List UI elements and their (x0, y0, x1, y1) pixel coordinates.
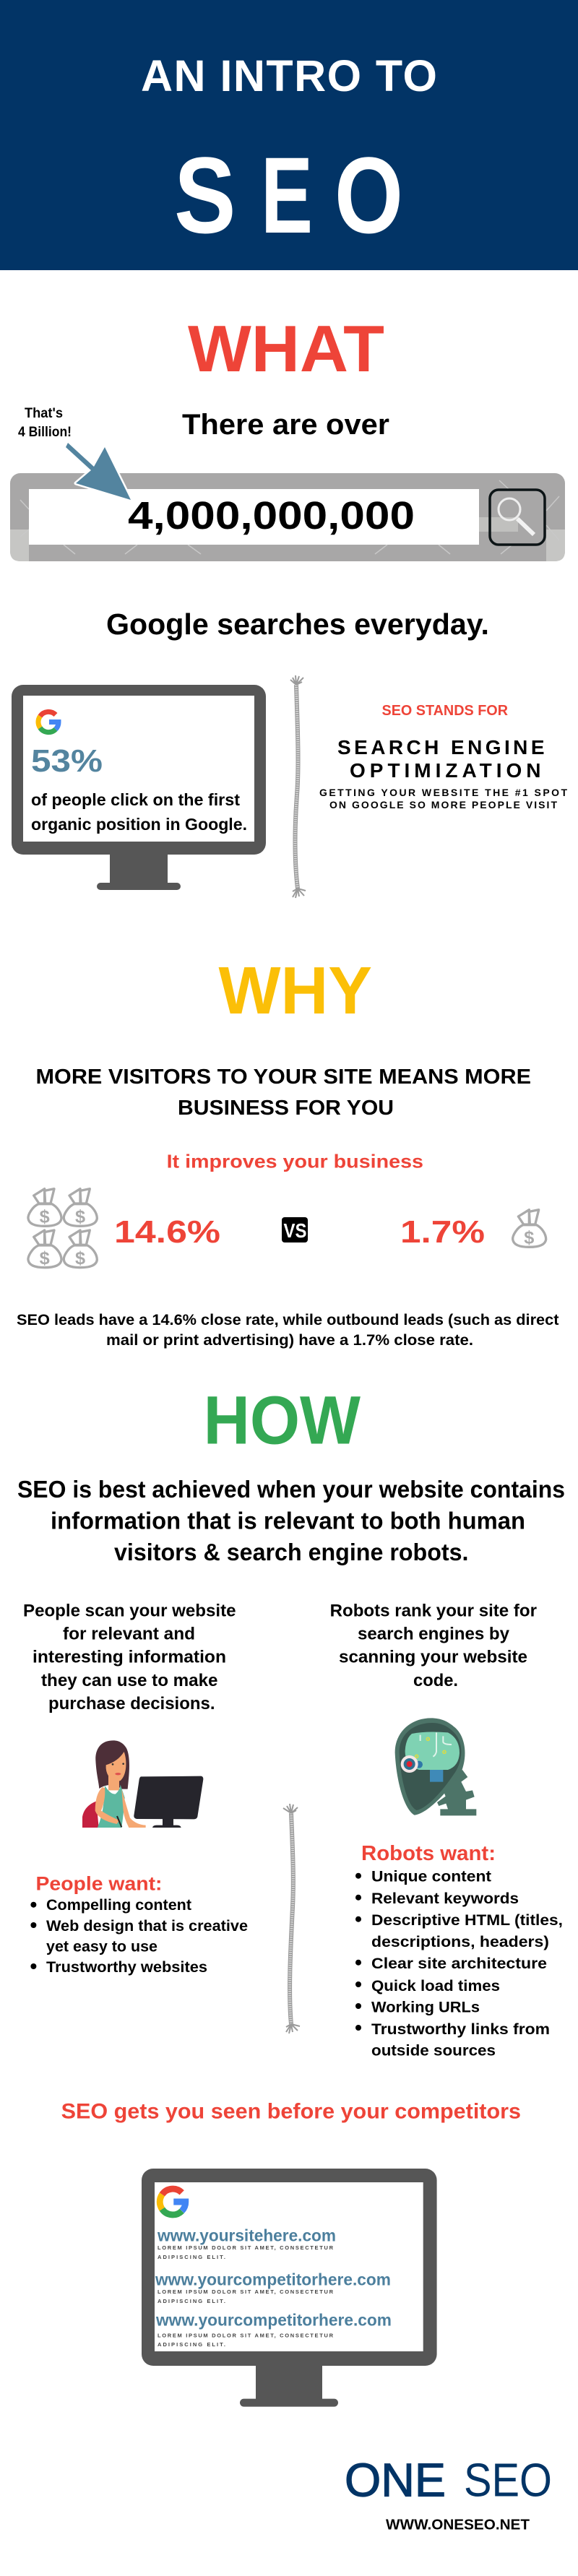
illustration: robot head (395, 1718, 476, 1815)
list: robots want: Unique content (371, 1869, 491, 1885)
result: competitor one: ADIPISCING ELIT. (158, 2298, 225, 2304)
list: people want: Web design that is creative (46, 1918, 248, 1935)
icon: google G (160, 2189, 186, 2215)
result: competitor one: www.yourcompetitorhere.com (155, 2270, 391, 2288)
badge: VS: VS (283, 1219, 306, 1242)
logo: ONE SEO (345, 2454, 552, 2507)
header banner (0, 0, 578, 270)
heading: search engine optimization (337, 736, 545, 782)
text: robots rank: code. (413, 1671, 458, 1690)
result: competitor one (155, 2270, 391, 2304)
illustration: woman at computer (82, 1740, 203, 1828)
list: robots want: Working URLs (371, 2000, 480, 2016)
text: SEO is best achieved: information that is relevant to both human (51, 1508, 525, 1534)
icon: money bag 2: $ (75, 1207, 85, 1227)
text: close rate explanation: mail or print advertising) have a 1.7% close rate. (106, 1332, 473, 1349)
subheading: more visitors: MORE VISITORS TO YOUR SITE MEANS MORE (36, 1066, 531, 1089)
icon: money bag 1: $ (40, 1207, 50, 1227)
text: people scan (23, 1601, 236, 1713)
list: people want: Compelling content (46, 1897, 191, 1914)
result: competitor two (155, 2310, 392, 2348)
title SEO: E (261, 134, 313, 256)
description: ON GOOGLE SO MORE PEOPLE VISIT (329, 799, 557, 811)
search button (490, 490, 545, 545)
callout: 4 billion (18, 406, 72, 440)
stat caption: organic position in Google. (31, 815, 247, 834)
icon: money bag 4: $ (75, 1248, 85, 1268)
text: people scan: they can use to make (41, 1671, 218, 1690)
icon: money bag 3: $ (40, 1248, 50, 1268)
title SEO (174, 134, 403, 256)
result: your site: ADIPISCING ELIT. (158, 2254, 225, 2260)
stat caption: of people click on the first (31, 790, 240, 809)
text: people scan: purchase decisions. (48, 1694, 215, 1713)
result: competitor two: www.yourcompetitorhere.com (155, 2310, 392, 2329)
result: your site (157, 2226, 336, 2260)
text: robots rank: Robots rank your site for (330, 1601, 537, 1620)
text: There are over: There are over (182, 409, 389, 441)
stat: 1.7 percent: 1.7% (400, 1214, 485, 1250)
subheading: more visitors (36, 1066, 531, 1120)
stat: 14.6 percent: 14.6% (114, 1214, 220, 1250)
text: people scan: People scan your website (23, 1601, 236, 1620)
logo: ONE SEO: SEO (464, 2454, 552, 2507)
text: SEO is best achieved: SEO is best achieved when your website contains (17, 1476, 565, 1503)
list: robots want: Descriptive HTML (titles, (371, 1912, 563, 1929)
description (319, 787, 567, 811)
list: robots want: descriptions, headers) (371, 1934, 549, 1950)
callout: 4 billion: 4 Billion! (18, 425, 72, 440)
rope divider (290, 675, 306, 898)
search input (29, 489, 479, 545)
text: Google searches everyday: Google searches everyday. (106, 608, 489, 641)
rope divider (283, 1804, 300, 2033)
text: it improves your business: It improves your business (167, 1150, 423, 1172)
text: robots rank (330, 1601, 537, 1690)
list: robots want: Trustworthy links from (371, 2021, 550, 2038)
result: competitor one: LOREM IPSUM DOLOR SIT AMET, CONSECTETUR (158, 2288, 334, 2295)
panel: SEO stands for (319, 703, 567, 811)
stat: 53 percent: 53% (31, 743, 103, 779)
icon: google G (38, 712, 59, 732)
result: competitor two: LOREM IPSUM DOLOR SIT AMET, CONSECTETUR (158, 2333, 334, 2339)
text: SEO is best achieved: visitors & search engine robots. (114, 1539, 468, 1565)
search bar (10, 473, 565, 561)
list: people want: Trustworthy websites (46, 1959, 207, 1976)
title line: AN INTRO TO (141, 51, 437, 100)
list: robots want: Quick load times (371, 1978, 500, 1994)
list: robots want (355, 1842, 563, 2059)
icon: single money bag (513, 1210, 546, 1248)
text: close rate explanation: SEO leads have a 14.6% close rate, while outbound leads (such as direct (17, 1312, 559, 1328)
search number: 4,000,000,000 (128, 494, 415, 537)
list: robots want: Clear site architecture (371, 1955, 547, 1972)
text: SEO is best achieved (17, 1476, 565, 1565)
panel: monitor 53 percent (12, 685, 266, 890)
list: robots want: Robots want: (361, 1842, 496, 1865)
title SEO: S (174, 134, 236, 256)
text: close rate explanation (17, 1312, 559, 1349)
heading: WHAT: WHAT (188, 313, 384, 386)
heading: WHY: WHY (218, 953, 372, 1028)
logo: ONE SEO: ONE (345, 2454, 446, 2507)
callout: 4 billion: That's (25, 406, 63, 421)
text: people scan: interesting information (33, 1648, 226, 1667)
description: GETTING YOUR WEBSITE THE #1 SPOT (319, 787, 567, 798)
icon group: four money bags (28, 1189, 97, 1268)
title SEO: O (335, 134, 403, 256)
list: people want (30, 1873, 248, 1976)
text: seen before competitors: SEO gets you seen before your competitors (61, 2100, 521, 2124)
heading: HOW: HOW (204, 1383, 361, 1459)
panel: SEO stands for: SEO STANDS FOR (381, 703, 509, 719)
heading: search engine optimization: OPTIMIZATION (350, 759, 540, 782)
result: your site: LOREM IPSUM DOLOR SIT AMET, CONSECTETUR (158, 2244, 334, 2251)
text: people scan: for relevant and (63, 1625, 195, 1644)
text: website URL: WWW.ONESEO.NET (386, 2517, 530, 2533)
result: your site: www.yoursitehere.com (157, 2226, 336, 2245)
text: robots rank: scanning your website (339, 1648, 527, 1667)
list: people want: People want: (36, 1873, 162, 1895)
list: robots want: Relevant keywords (371, 1890, 519, 1907)
icon: single money bag: $ (524, 1228, 534, 1248)
stat caption (31, 790, 247, 834)
panel: monitor search results (142, 2169, 437, 2407)
arrow (66, 443, 131, 500)
heading: search engine optimization: SEARCH ENGINE (337, 736, 545, 758)
list: robots want: outside sources (371, 2043, 496, 2059)
text: robots rank: search engines by (358, 1625, 510, 1644)
list: people want: yet easy to use (46, 1939, 158, 1955)
result: competitor two: ADIPISCING ELIT. (158, 2341, 225, 2348)
subheading: more visitors: BUSINESS FOR YOU (178, 1097, 394, 1120)
